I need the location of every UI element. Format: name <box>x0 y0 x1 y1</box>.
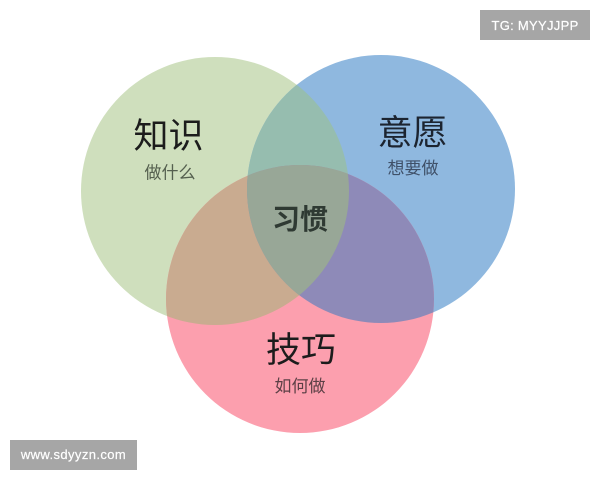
circle: desire <box>247 55 515 323</box>
overlap: knowledge and desire <box>248 85 348 176</box>
watermark: website: www.sdyyzn.com <box>20 447 126 462</box>
watermark: TG <box>480 10 590 40</box>
circle: skill <box>166 165 434 433</box>
heading: skill: 技巧 <box>266 331 336 370</box>
overlap: habit center <box>247 165 349 295</box>
overlap: desire and skill <box>247 165 434 323</box>
watermark: TG: TG: MYYJJPP <box>491 18 579 33</box>
label: want to do: 想要做 <box>388 159 438 178</box>
label: what to do: 做什么 <box>144 164 196 182</box>
watermark: website <box>10 440 137 470</box>
overlap: knowledge and skill <box>166 176 299 325</box>
heading: habit: 习惯 <box>272 204 328 235</box>
heading: desire: 意愿 <box>377 114 448 153</box>
label: how to do: 如何做 <box>274 377 326 396</box>
heading: knowledge: 知识 <box>133 117 204 156</box>
circle: knowledge <box>81 57 349 325</box>
